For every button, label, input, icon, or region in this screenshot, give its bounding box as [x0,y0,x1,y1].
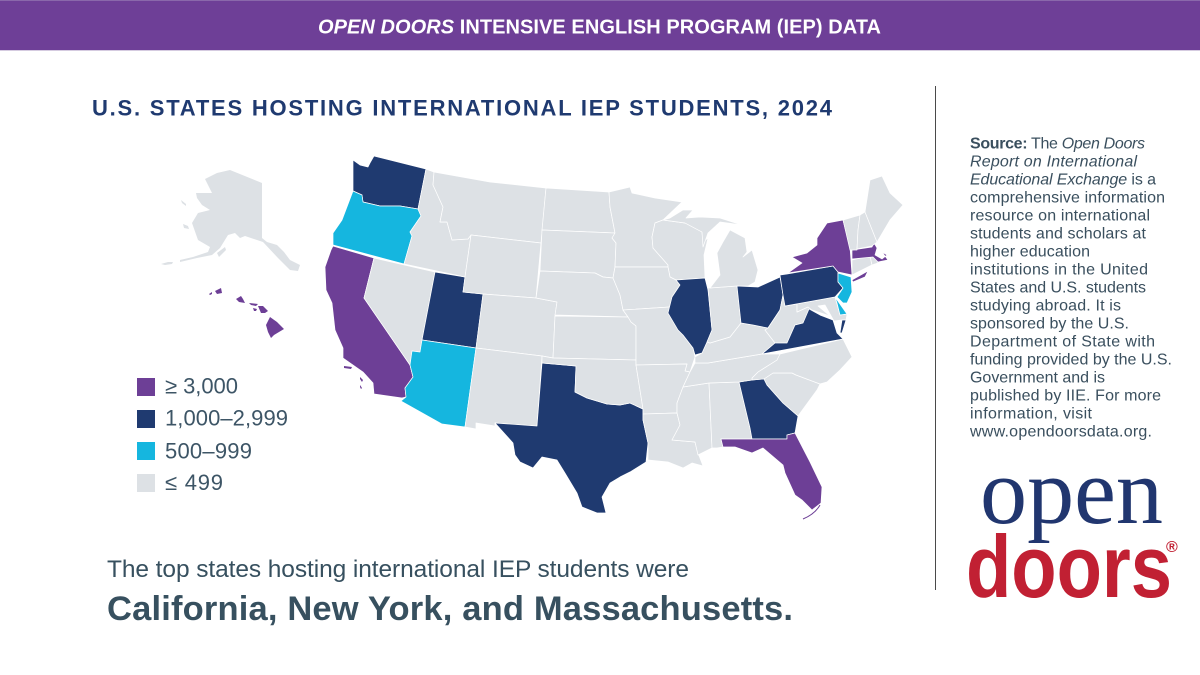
vertical divider [934,86,936,590]
source paragraph: funding provided by the U.S. [970,352,1172,368]
state: Michigan [663,210,758,288]
US choropleth map [161,156,903,519]
state: Connecticut [852,256,872,275]
state: Delaware [835,297,847,315]
state: Wisconsin [652,220,708,280]
state: North Carolina [752,339,852,384]
source paragraph: published by IIE. For more [970,388,1161,404]
source paragraph: www.opendoorsdata.org. [969,424,1152,440]
map legend [137,374,288,495]
source paragraph: Report on International [970,154,1137,170]
source paragraph [969,136,1172,440]
header banner: OPEN DOORS INTENSIVE ENGLISH PROGRAM (IEP) DATA [318,16,881,38]
state: Iowa [613,267,680,310]
state: Rhode Island [870,256,878,265]
state: Georgia [739,379,798,439]
Open Doors logo: open [980,440,1163,544]
source paragraph: institutions in the United [970,262,1148,278]
state: Alaska [161,170,300,271]
legend item: 500 to 999: 500–999 [165,438,252,464]
state: Oregon [333,191,421,264]
state: Massachusetts [852,243,888,262]
state: South Carolina [764,373,820,416]
state: Mississippi [672,383,712,455]
state: Louisiana [643,413,703,468]
source paragraph: Source: The Open Doors [970,136,1145,152]
takeaway text: The top states hosting international IEP students were [107,556,689,583]
header banner [0,0,1200,51]
source paragraph: students and scholars at [970,226,1147,242]
legend item: 3,000 or more: ≥ 3,000 [165,374,238,398]
state: Indiana [707,286,741,343]
state: Nevada [364,258,435,365]
state: Texas [495,363,648,513]
source paragraph: information, visit [970,406,1093,422]
state: California [325,246,413,398]
state: Hawaii [209,288,284,338]
state: Oklahoma [542,356,643,409]
legend item: 499 or fewer [137,470,223,495]
legend item: 499 or fewer: ≤ 499 [165,470,223,495]
state: Arkansas [636,364,690,414]
state: Alabama [709,382,752,448]
state: Maryland [785,297,847,321]
state: Kansas [553,316,636,360]
state: Minnesota [609,187,682,267]
state: Illinois [668,278,712,355]
state: Montana [433,172,546,243]
state: Kentucky [695,323,775,363]
Open Doors logo [966,440,1178,616]
state: South Dakota [540,230,616,278]
source paragraph: Department of State with [970,334,1155,350]
source paragraph: comprehensive information [970,190,1165,206]
source paragraph: higher education [970,244,1090,260]
legend item: 1,000 to 2,999: 1,000–2,999 [165,406,288,430]
state: Florida [721,433,822,510]
state: New Jersey [837,273,852,303]
state: Arizona [401,340,476,427]
map title: U.S. STATES HOSTING INTERNATIONAL IEP STUDENTS, 2024 [92,96,833,120]
source paragraph: studying abroad. It is [970,298,1121,314]
state: New York [788,220,868,282]
state: Tennessee [683,354,780,387]
state: Ohio [737,277,783,328]
state: North Dakota [542,188,615,233]
state: New Mexico [465,348,542,429]
source paragraph: States and U.S. students [970,280,1146,296]
state: Maine [865,176,903,242]
state: Virginia [762,309,846,354]
Open Doors logo: ® [1166,539,1178,556]
source paragraph: sponsored by the U.S. [970,316,1129,332]
state: Utah [422,272,483,348]
takeaway text: California, New York, and Massachusetts. [107,590,793,628]
state: Wyoming [463,235,541,298]
state: Idaho [404,169,471,277]
icon: Florida keys [803,505,820,519]
takeaway text [107,556,793,628]
state: Nebraska [536,271,628,317]
source paragraph: Educational Exchange is a [970,172,1156,188]
state: Colorado [476,294,557,358]
state: Missouri [623,307,695,372]
source paragraph: Government and is [970,370,1105,386]
state: New Hampshire [857,212,877,249]
icon: California channel islands [344,366,363,389]
source paragraph: resource on international [970,208,1150,224]
state: Pennsylvania [780,266,843,306]
state: Vermont [843,215,860,250]
state: Washington [353,156,426,209]
state: West Virginia [765,295,812,343]
